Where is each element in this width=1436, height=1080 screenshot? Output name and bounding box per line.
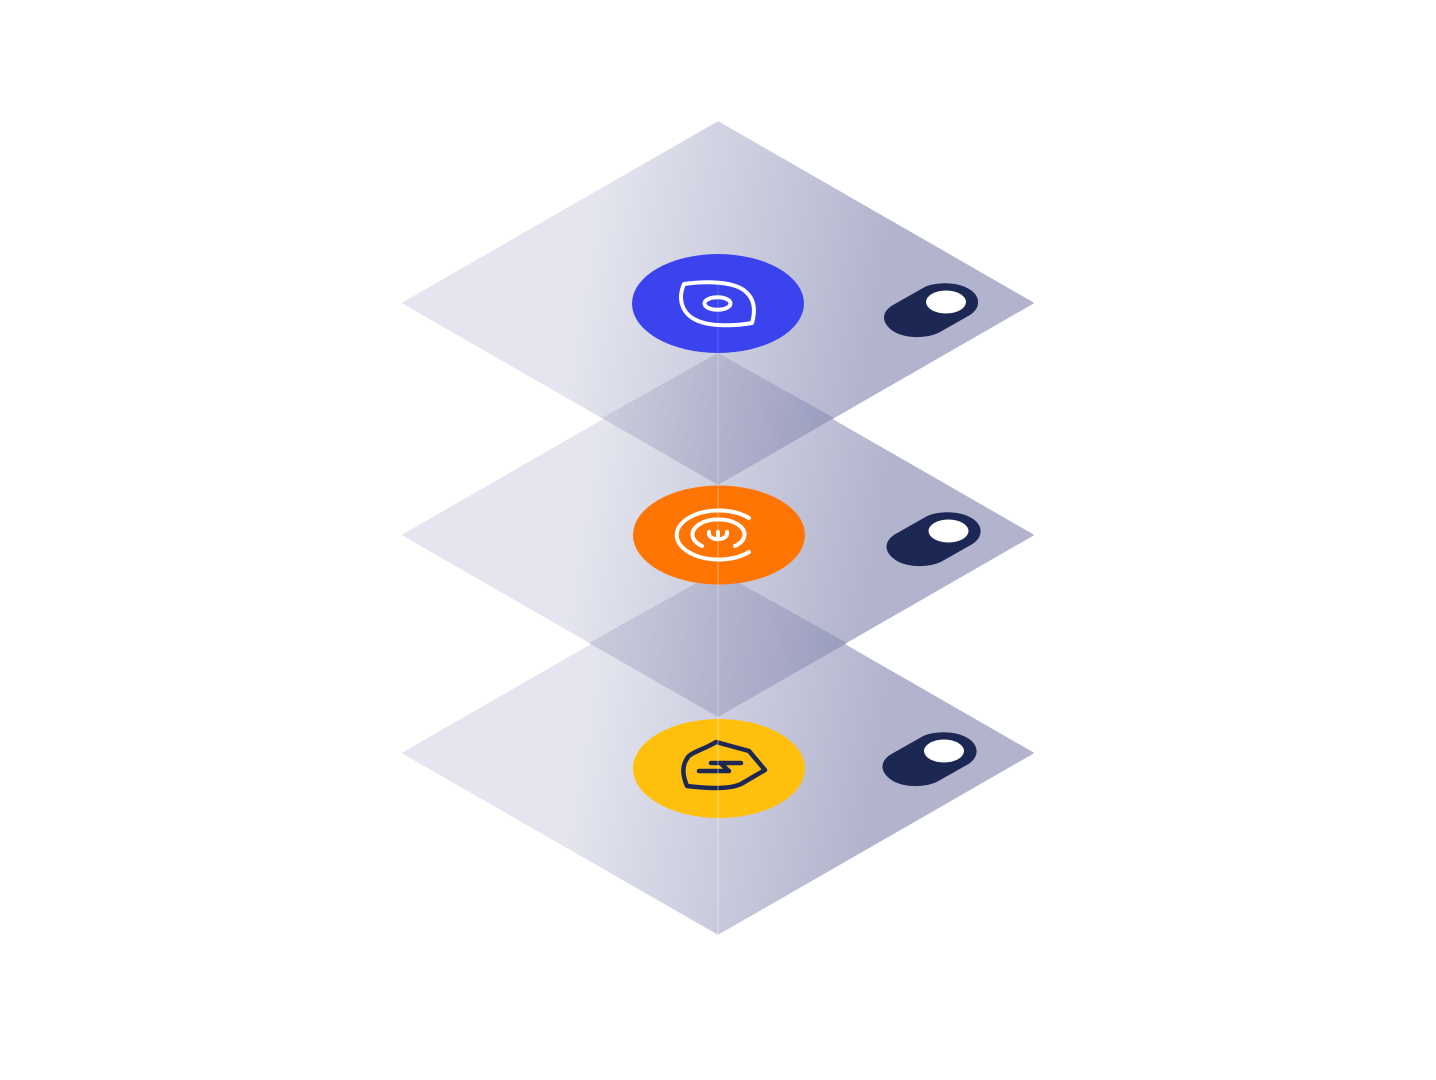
layer 1 badge: blue disc with eye icon (632, 254, 804, 353)
layer 2 plate (403, 354, 1033, 716)
icon: shield with bolt (683, 742, 765, 788)
layer 2 badge: orange disc with fingerprint icon (633, 486, 805, 584)
layer 1 plate (403, 122, 1033, 484)
centre seam highlights (717, 285, 719, 935)
toggle: layer 1 (884, 283, 978, 337)
overlap: layers 1 and 2 (602, 353, 834, 485)
toggle: layer 3 (882, 732, 977, 786)
icon: eye (681, 282, 754, 325)
toggle: layer 2 (886, 512, 981, 566)
icon: fingerprint rings (677, 510, 749, 560)
layer 3 badge: yellow disc with shield icon (633, 719, 805, 818)
layer 3 plate (403, 572, 1033, 934)
overlap: layers 2 and 3 (589, 571, 847, 717)
